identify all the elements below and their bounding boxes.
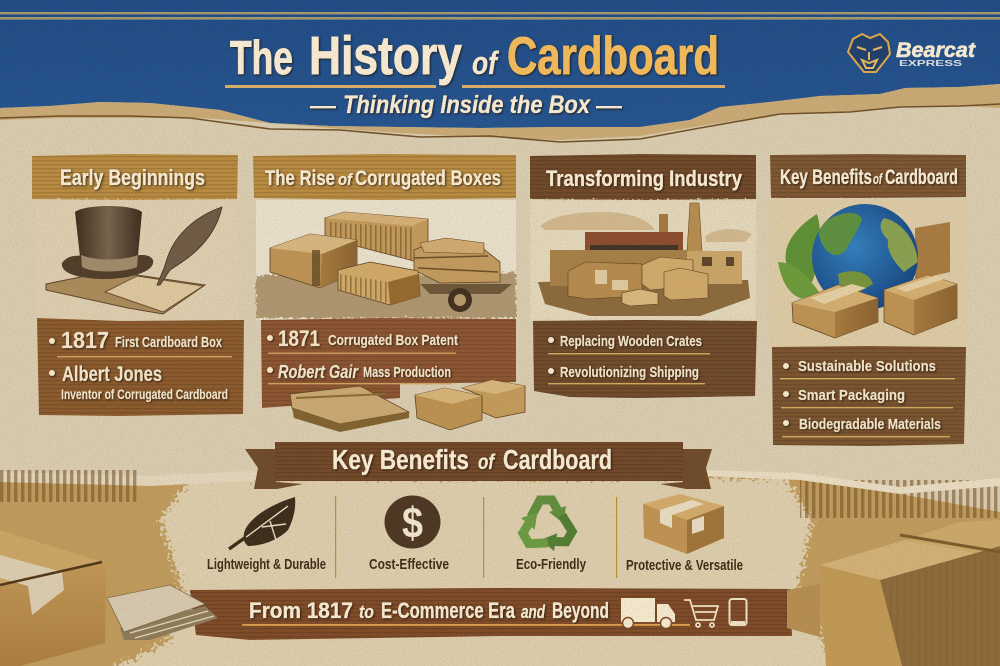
illustration background: [530, 200, 756, 320]
banner: key benefits: Cardboard: [503, 444, 612, 475]
facts list: [37, 318, 244, 416]
icon: smartphone: [730, 599, 746, 625]
fact: 1817: [49, 327, 222, 353]
logo: Bearcat Express: EXPRESS: [899, 59, 963, 68]
tagline: From 1817: [249, 598, 353, 623]
illustration: factory and crates: [538, 203, 752, 316]
panel heading: The Rise: [265, 167, 335, 190]
tagline: E-Commerce Era: [381, 598, 516, 623]
fact: 1871: 1871: [278, 326, 320, 351]
facts list: [772, 346, 966, 446]
fact: biodegradable: Biodegradable Materials: [799, 416, 941, 433]
banner: key benefits: Key Benefits: [332, 444, 469, 475]
panel heading: of: [873, 171, 883, 188]
title: Cardboard: [507, 27, 719, 86]
panel heading: [253, 154, 516, 200]
illustration background: [256, 200, 516, 320]
tagline: to: [359, 602, 374, 622]
fact: wooden crates: Replacing Wooden Crates: [560, 333, 702, 350]
fact: Robert Gair: Robert Gair: [278, 362, 359, 382]
panel: key benefits: [770, 154, 966, 446]
fact: 1871: Corrugated Box Patent: [328, 332, 458, 349]
illustration: book and top hat with quill: [46, 206, 222, 314]
illustration: globe, leaves and boxes: [778, 204, 957, 338]
subtitle: Thinking Inside the Box: [343, 91, 591, 119]
tagline: [249, 598, 609, 623]
fact: Albert Jones: [49, 363, 228, 402]
facts list: [261, 318, 516, 408]
benefit: lightweight and durable: Lightweight & Durable: [207, 557, 326, 573]
logo: Bearcat Express: [848, 34, 976, 72]
facts list: [533, 320, 757, 398]
icon: delivery truck: [621, 598, 675, 628]
benefit: cost effective: Cost-Effective: [369, 556, 449, 573]
illustration: crumpled cardboard stack: [107, 585, 218, 640]
illustration: large box bottom right: [787, 520, 1000, 666]
bottom band: [190, 588, 792, 640]
fact: 1817: 1817: [61, 327, 109, 353]
title underline: [225, 85, 725, 88]
header band: [0, 0, 1000, 142]
benefit: protective and versatile: [626, 494, 743, 574]
fact: Albert Jones: Albert Jones: [62, 363, 162, 386]
tagline: and: [521, 602, 546, 622]
panel heading: [530, 154, 756, 200]
panel: transforming industry: [530, 154, 757, 398]
title: History: [309, 26, 462, 86]
panel: early beginnings: [32, 154, 244, 416]
fact: Albert Jones: Inventor of Corrugated Cardboard: [61, 387, 228, 402]
fact: Robert Gair: Mass Production: [363, 365, 451, 381]
icon: shipping box: [643, 494, 724, 554]
banner: key benefits: [245, 442, 712, 489]
benefit: eco friendly: [516, 500, 586, 573]
icon: shopping cart: [684, 600, 718, 627]
fact: 1871: [267, 326, 458, 351]
panel heading: [770, 154, 966, 198]
benefit: eco friendly: Eco-Friendly: [516, 556, 586, 573]
icon: dollar coin: $: [402, 499, 423, 548]
fact: sustainable: Sustainable Solutions: [798, 358, 936, 375]
illustration: stacked boxes on cart: [270, 212, 512, 312]
icon: feather leaf: [229, 497, 295, 549]
icon: bearcat head: [848, 34, 890, 72]
illustration background: [770, 199, 966, 349]
benefit: protective and versatile: Protective & Versatile: [626, 557, 743, 574]
title: [230, 26, 719, 86]
fact: 1817: First Cardboard Box: [115, 335, 222, 351]
logo: Bearcat Express: Bearcat: [896, 39, 976, 62]
panel: rise of corrugated boxes: [253, 154, 525, 432]
banner: key benefits: of: [478, 451, 496, 474]
title: The: [230, 31, 293, 84]
panel heading: Early Beginnings: [60, 165, 205, 190]
benefit: cost effective: [369, 496, 449, 573]
icon: recycle arrows: [516, 500, 577, 554]
fact: shipping: Revolutionizing Shipping: [560, 364, 699, 381]
column dividers: [335, 496, 617, 578]
illustration: large box bottom left: [0, 530, 106, 666]
panel heading: Transforming Industry: [546, 166, 743, 191]
panel heading: Corrugated Boxes: [355, 167, 501, 190]
fact: Robert Gair: [267, 362, 451, 382]
benefit: lightweight and durable: [207, 497, 326, 573]
illustration background: [36, 200, 238, 320]
tagline: Beyond: [552, 598, 609, 623]
panel heading: [32, 154, 238, 200]
title: of: [472, 45, 500, 81]
panel heading: Cardboard: [885, 166, 958, 189]
fact: smart packaging: Smart Packaging: [798, 387, 905, 404]
illustration: flat cardboard and small boxes: [290, 380, 525, 432]
panel heading: of: [338, 170, 354, 189]
panel heading: Key Benefits: [780, 166, 872, 189]
